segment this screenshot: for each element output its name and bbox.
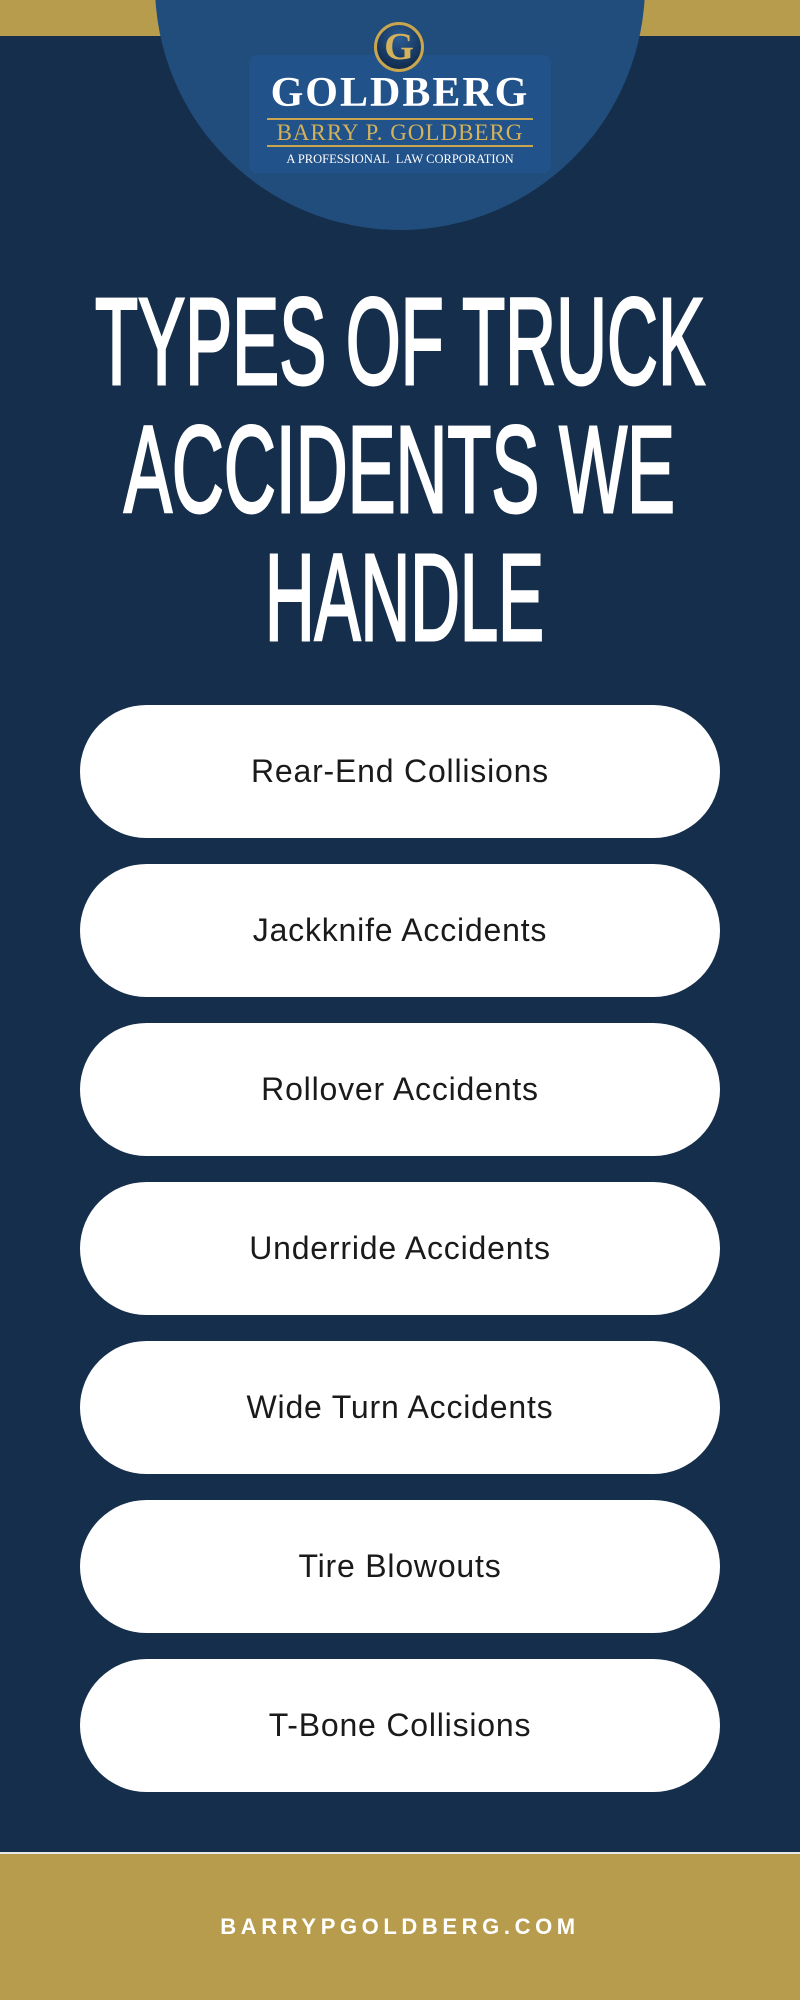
pill: T-Bone Collisions: T-Bone Collisions — [269, 1707, 531, 1743]
logo circle — [155, 0, 645, 230]
logo text: BARRY P. GOLDBERG: BARRY P. GOLDBERG — [277, 120, 523, 145]
pill: Rear-End Collisions — [80, 705, 720, 838]
pill: Rollover Accidents: Rollover Accidents — [261, 1071, 539, 1107]
pill: Wide Turn Accidents — [80, 1341, 720, 1474]
pill: Tire Blowouts — [80, 1500, 720, 1633]
title — [95, 280, 706, 660]
pill: Tire Blowouts: Tire Blowouts — [298, 1548, 502, 1584]
pill list — [80, 705, 720, 1792]
pill: Underride Accidents — [80, 1182, 720, 1315]
icon: G emblem — [374, 22, 424, 72]
pill: T-Bone Collisions — [80, 1659, 720, 1792]
logo — [249, 22, 551, 173]
footer url: BARRYPGOLDBERG.COM — [220, 1914, 580, 1939]
icon: G emblem: G — [384, 26, 414, 68]
logo text: tagline: A PROFESSIONAL LAW CORPORATION — [286, 152, 514, 166]
logo text: GOLDBERG: GOLDBERG — [271, 70, 529, 116]
pill: Rear-End Collisions: Rear-End Collisions — [251, 753, 549, 789]
footer — [0, 1854, 800, 2000]
pill: Underride Accidents: Underride Accidents — [249, 1230, 551, 1266]
pill: Jackknife Accidents: Jackknife Accidents — [253, 912, 547, 948]
pill: Rollover Accidents — [80, 1023, 720, 1156]
pill: Wide Turn Accidents: Wide Turn Accidents — [247, 1389, 553, 1425]
pill: Jackknife Accidents — [80, 864, 720, 997]
